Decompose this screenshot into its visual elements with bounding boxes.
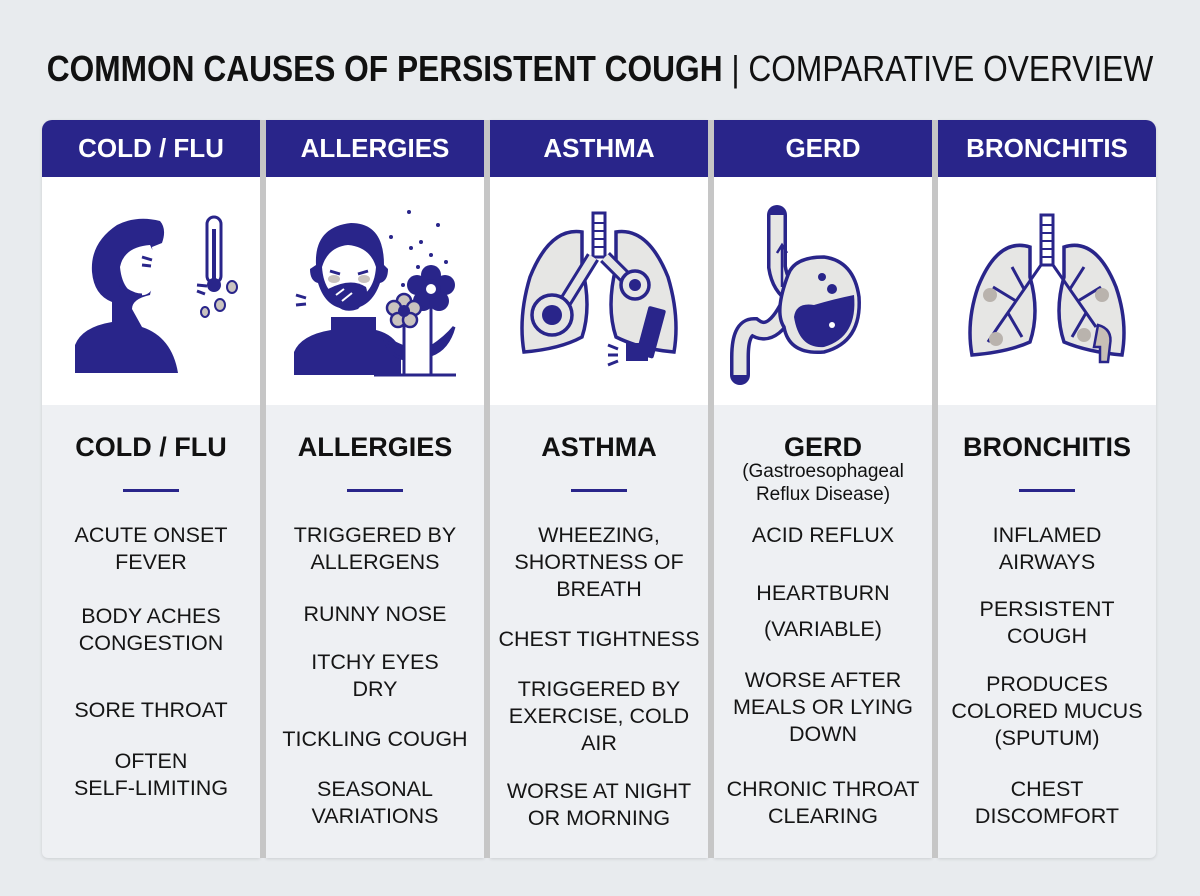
icon: sneezing person with flowers — [266, 177, 484, 405]
panel: cold flu: OFTEN — [115, 749, 187, 773]
panel: cold flu — [42, 120, 260, 858]
panel: gerd: HEARTBURN — [756, 581, 890, 605]
panel: bronchitis: INFLAMED — [993, 523, 1101, 547]
panel: allergies: TICKLING COUGH — [282, 727, 468, 751]
header: bronchitis: BRONCHITIS — [966, 133, 1128, 163]
panel: cold flu: FEVER — [115, 550, 187, 574]
symptoms list — [951, 523, 1143, 828]
name with subtitle: GERD — [784, 432, 862, 462]
underline — [123, 489, 179, 492]
panel: gerd — [714, 120, 932, 858]
icon: lungs with inhaler — [490, 177, 708, 405]
panel: gerd: DOWN — [789, 722, 857, 746]
panel: bronchitis: (SPUTUM) — [994, 726, 1100, 750]
header: gerd: GERD — [785, 133, 861, 163]
name: COLD / FLU — [75, 432, 227, 462]
panel: asthma: WHEEZING, — [538, 523, 660, 547]
panel: gerd: CLEARING — [768, 804, 878, 828]
panel: asthma: BREATH — [556, 577, 642, 601]
panel: allergies: TRIGGERED BY — [294, 523, 456, 547]
panel: bronchitis: AIRWAYS — [999, 550, 1095, 574]
header: cold flu: COLD / FLU — [78, 133, 224, 163]
header: gerd — [714, 120, 932, 177]
underline — [1019, 489, 1075, 492]
panel: bronchitis: DISCOMFORT — [975, 804, 1119, 828]
panel: asthma: CHEST TIGHTNESS — [498, 627, 700, 651]
symptoms list — [74, 523, 228, 800]
symptoms list — [498, 523, 700, 830]
panel: asthma: EXERCISE, COLD — [509, 704, 689, 728]
panel: bronchitis: PRODUCES — [986, 672, 1108, 696]
name: ASTHMA — [541, 432, 657, 462]
panel: asthma: OR MORNING — [528, 806, 670, 830]
panel: gerd: (VARIABLE) — [764, 617, 882, 641]
icon: sneezing man with thermometer — [42, 177, 260, 405]
panel: gerd: WORSE AFTER — [745, 668, 901, 692]
icon: inflamed lungs — [938, 177, 1156, 405]
header: bronchitis — [938, 120, 1156, 177]
title: COMMON CAUSES OF PERSISTENT COUGH | COMPARATIVE OVERVIEW — [47, 48, 1153, 89]
panel: bronchitis: PERSISTENT — [980, 597, 1114, 621]
panel: allergies: ITCHY EYES — [311, 650, 439, 674]
panel: cold flu: CONGESTION — [79, 631, 223, 655]
panel: asthma — [490, 120, 708, 858]
underline — [347, 489, 403, 492]
header: allergies: ALLERGIES — [301, 133, 449, 163]
name: ALLERGIES — [298, 432, 452, 462]
panel: bronchitis: COUGH — [1007, 624, 1087, 648]
panel: asthma: SHORTNESS OF — [514, 550, 684, 574]
panel: allergies: VARIATIONS — [311, 804, 439, 828]
panel: allergies: SEASONAL — [317, 777, 433, 801]
underline — [571, 489, 627, 492]
panel: allergies: ALLERGENS — [310, 550, 440, 574]
panel: asthma: AIR — [581, 731, 617, 755]
panel: cold flu: SORE THROAT — [74, 698, 228, 722]
header: allergies — [266, 120, 484, 177]
panel: asthma: WORSE AT NIGHT — [507, 779, 691, 803]
panel: asthma: TRIGGERED BY — [518, 677, 680, 701]
subtitle: (Gastroesophageal — [742, 461, 904, 482]
panel: bronchitis: COLORED MUCUS — [951, 699, 1143, 723]
panel: gerd: MEALS OR LYING — [733, 695, 913, 719]
panel: cold flu: SELF-LIMITING — [74, 776, 228, 800]
panel: allergies: DRY — [352, 677, 398, 701]
symptoms list — [727, 523, 919, 828]
subtitle: Reflux Disease) — [756, 484, 890, 505]
name: BRONCHITIS — [963, 432, 1131, 462]
panel: gerd: CHRONIC THROAT — [727, 777, 919, 801]
panel: cold flu: ACUTE ONSET — [75, 523, 227, 547]
icon: stomach with reflux — [714, 177, 932, 405]
subtitle — [742, 461, 904, 505]
header: asthma — [490, 120, 708, 177]
header: cold flu — [42, 120, 260, 177]
panel: allergies: RUNNY NOSE — [304, 602, 446, 626]
panel: cold flu: BODY ACHES — [81, 604, 221, 628]
header: asthma: ASTHMA — [543, 133, 655, 163]
panel: allergies — [266, 120, 484, 858]
symptoms list — [282, 523, 468, 828]
panel: bronchitis — [938, 120, 1156, 858]
panel: bronchitis: CHEST — [1011, 777, 1083, 801]
panel: gerd: ACID REFLUX — [752, 523, 894, 547]
